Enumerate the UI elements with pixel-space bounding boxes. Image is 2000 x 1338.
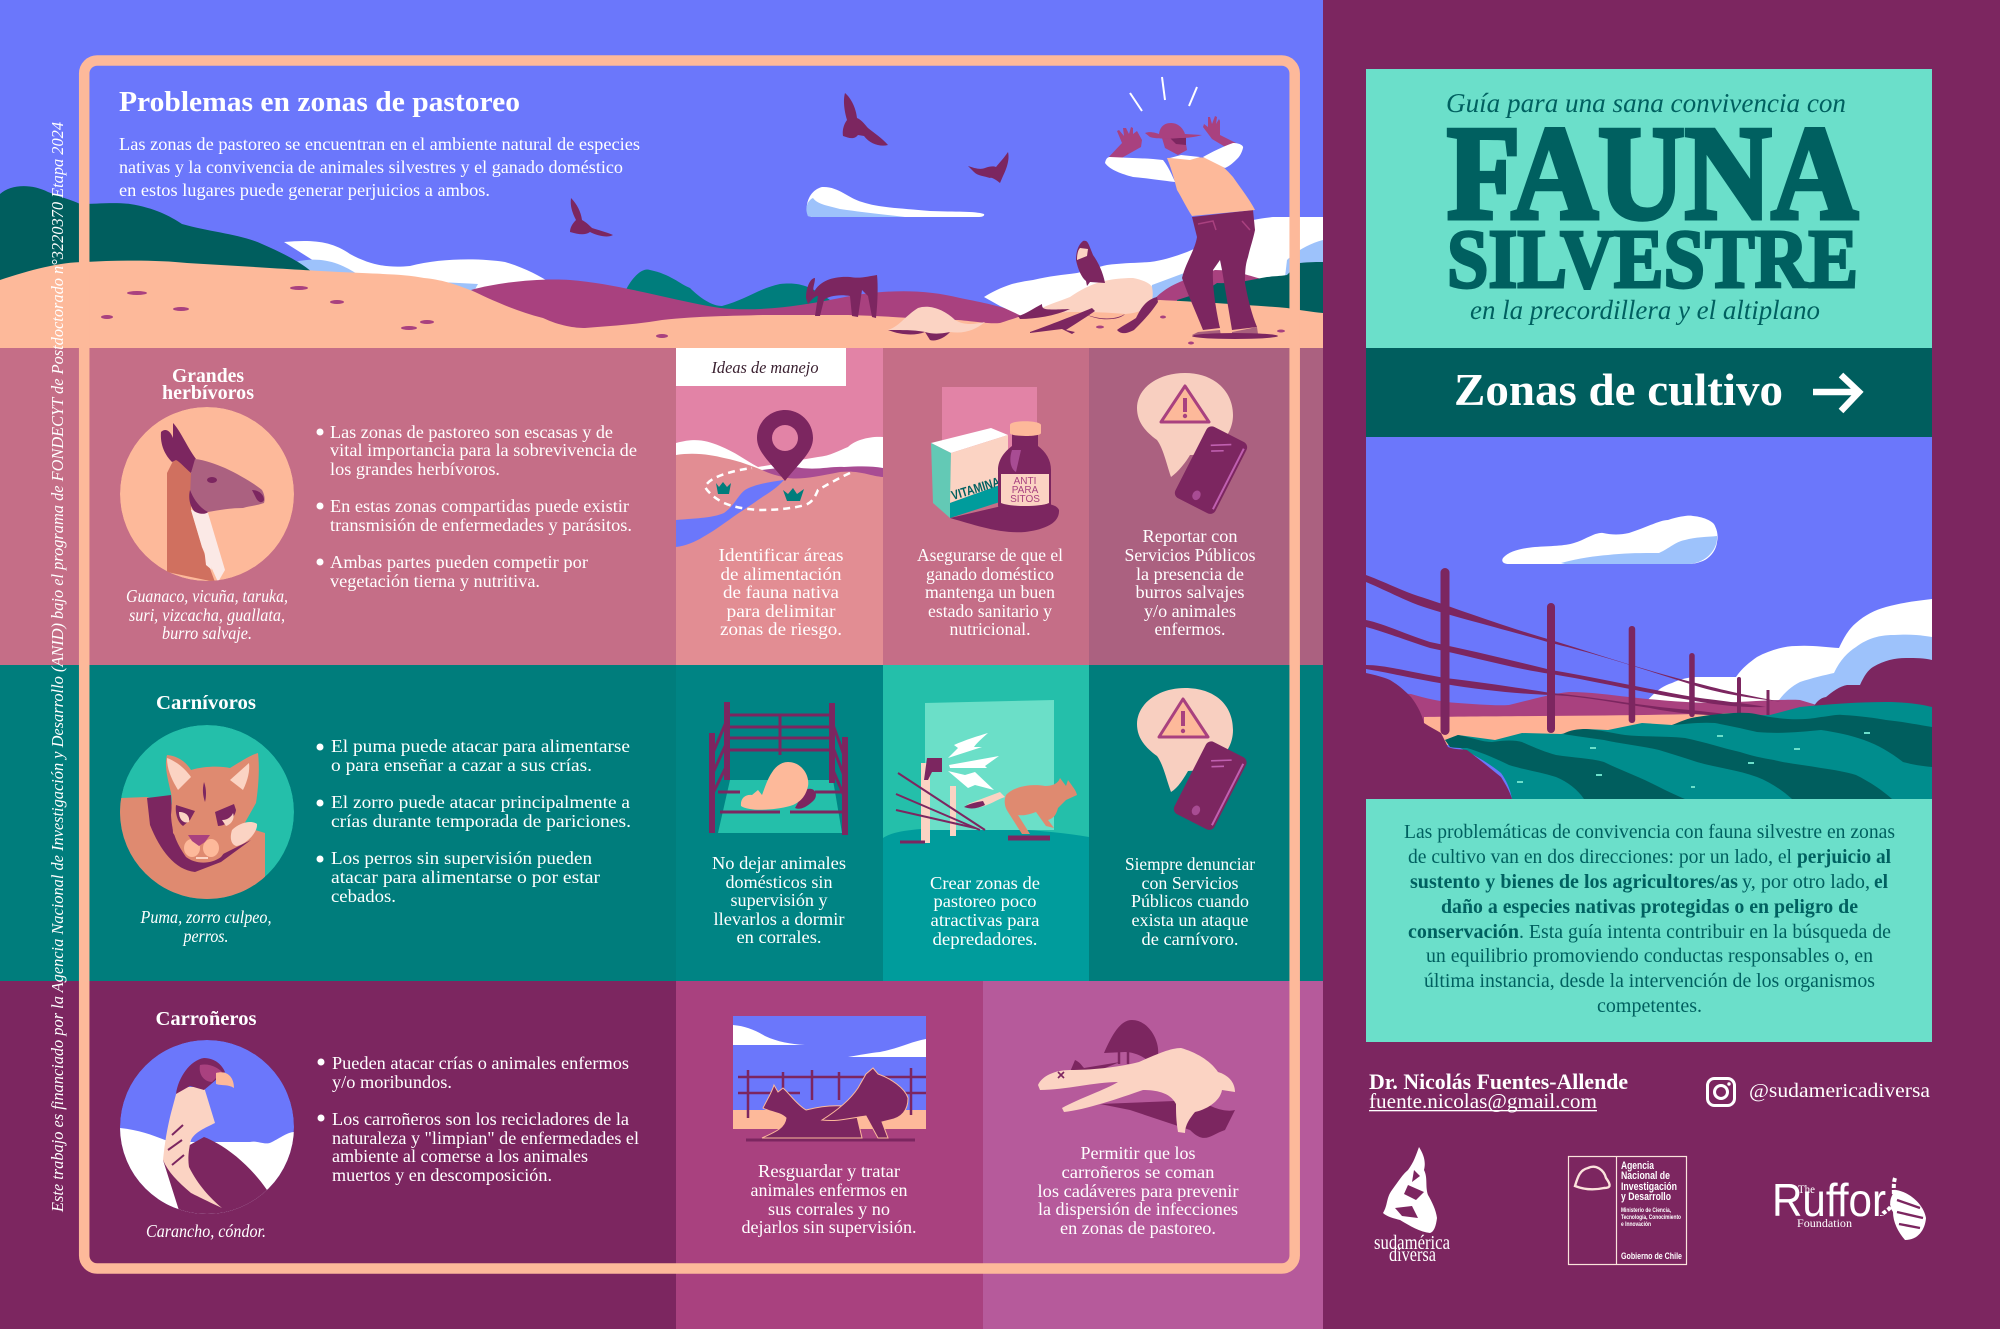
logo: ANID: Investigación xyxy=(1621,1181,1677,1193)
panel: intro description: de cultivo van en dos direcciones: por un lado, el xyxy=(1408,846,1792,868)
text: permitir: Permitir que los xyxy=(1080,1143,1196,1163)
text: identificar areas: de fauna nativa xyxy=(723,582,839,602)
text: reportar: burros salvajes xyxy=(1136,582,1244,602)
label: ideas de manejo: Ideas de manejo xyxy=(711,358,818,377)
fence xyxy=(1366,568,1783,735)
bullets: scavengers: muertos y en descomposición. xyxy=(332,1165,552,1185)
cloud top xyxy=(1502,516,1718,564)
back hills and clouds xyxy=(0,186,1323,340)
contact: instagram xyxy=(1708,1078,1930,1106)
intro text: problemas: en estos lugares puede generar perjuicios a ambos. xyxy=(119,180,490,200)
arrow xyxy=(1813,375,1859,411)
bullets: herbivores: Las zonas de pastoreo son escasas y de xyxy=(330,422,613,442)
intro text: problemas xyxy=(119,134,640,200)
dead animals xyxy=(888,278,1158,341)
farmer xyxy=(1105,77,1278,339)
text: permitir: los cadáveres para prevenir xyxy=(1038,1181,1238,1201)
text: reportar: Reportar con xyxy=(1142,526,1238,546)
heading: grandes herbivoros: Grandes xyxy=(172,365,244,387)
text: no dejar animales: llevarlos a dormir xyxy=(714,909,844,929)
text: reportar: enfermos. xyxy=(1154,619,1226,639)
icon: bird circle xyxy=(120,1040,294,1220)
peach ground xyxy=(0,261,1323,348)
text: asegurarse: ganado doméstico xyxy=(926,564,1054,584)
heading: carnivoros: Carnívoros xyxy=(156,692,256,714)
text: reportar: Servicios Públicos xyxy=(1124,545,1256,565)
text: no dejar animales: supervisión y xyxy=(730,890,828,910)
logo: sudamerica diversa: diversa xyxy=(1389,1244,1436,1266)
text: resguardar: dejarlos sin supervisión. xyxy=(742,1217,916,1237)
text: crear zonas: depredadores. xyxy=(932,929,1038,949)
text: asegurarse: Asegurarse de que el xyxy=(917,545,1063,565)
text: identificar areas: Identificar áreas xyxy=(718,545,844,565)
text: siempre denunciar: con Servicios xyxy=(1142,873,1238,893)
crop fields xyxy=(1366,673,1932,799)
icon: vitamins and antiparasitic bottle: VITAMINA xyxy=(949,474,1002,503)
icon: guanaco circle xyxy=(120,407,294,582)
text: permitir: la dispersión de infecciones xyxy=(1038,1199,1238,1219)
text: no dejar animales xyxy=(712,853,846,947)
bullets: scavengers: ambiente al comerse a los animales xyxy=(332,1146,588,1166)
label: ideas de manejo xyxy=(676,348,846,386)
caption: scavenger species: Carancho, cóndor. xyxy=(146,1221,266,1241)
bullets: scavengers: Pueden atacar crías o animales enfermos xyxy=(332,1053,629,1073)
panel: intro description: y, por otro lado, xyxy=(1742,871,1870,893)
panel: intro description: . Esta guía intenta contribuir en la búsqueda de xyxy=(1519,921,1891,943)
bullets: carnivores: o para enseñar a cazar a sus crías. xyxy=(331,755,592,775)
icon: electric fence and fox xyxy=(883,665,1089,843)
text: reportar xyxy=(1124,526,1256,639)
bullets: scavengers: naturaleza y "limpian" de enfermedades el xyxy=(332,1128,639,1148)
bullets: carnivores xyxy=(316,736,631,906)
bullets: scavengers xyxy=(318,1053,639,1185)
text: siempre denunciar: Siempre denunciar xyxy=(1125,854,1255,874)
text: no dejar animales: domésticos sin xyxy=(726,872,832,892)
text: asegurarse: nutricional. xyxy=(950,619,1030,639)
bullets: herbivores xyxy=(316,422,637,591)
panel: intro description: competentes. xyxy=(1597,995,1702,1017)
icon: vitamins and antiparasitic bottle: SITOS xyxy=(1010,494,1040,505)
text: siempre denunciar: exista un ataque xyxy=(1132,910,1248,930)
text: identificar areas: para delimitar xyxy=(726,601,836,621)
logo: ANID: e Innovación xyxy=(1621,1222,1651,1228)
heading: grandes herbivoros xyxy=(162,365,254,404)
text: reportar: la presencia de xyxy=(1136,564,1244,584)
title: fauna: FAUNA xyxy=(1447,99,1858,247)
logo: sudamerica diversa xyxy=(1374,1147,1450,1266)
logo: ANID: Agencia xyxy=(1621,1160,1655,1172)
logo: ANID: y Desarrollo xyxy=(1621,1191,1671,1203)
banner: zonas de cultivo: Zonas de cultivo xyxy=(1454,365,1783,415)
text: no dejar animales: No dejar animales xyxy=(712,853,846,873)
title: silvestre: SILVESTRE xyxy=(1447,213,1858,306)
text: resguardar: Resguardar y tratar xyxy=(758,1161,900,1181)
text: crear zonas: pastoreo poco xyxy=(934,891,1036,911)
contact: author: fuente.nicolas@gmail.com xyxy=(1369,1089,1597,1113)
heading: problemas: Problemas en zonas de pastoreo xyxy=(119,87,520,118)
bullets: herbivores: los grandes herbívoros. xyxy=(330,459,500,479)
icon: vitamins and antiparasitic bottle: ANTI xyxy=(1014,476,1036,487)
text: asegurarse: estado sanitario y xyxy=(928,601,1052,621)
icon: dead llama with scavenger xyxy=(1038,1020,1235,1138)
logo: ANID: Tecnología, Conocimiento xyxy=(1621,1215,1681,1221)
dog silhouette xyxy=(806,275,878,318)
panel: intro description: daño a especies nativas protegidas o en peligro de xyxy=(1441,896,1858,918)
right cover panel background xyxy=(1323,0,2000,1329)
logo: ANID xyxy=(1568,1156,1686,1265)
contact: author: Dr. Nicolás Fuentes-Allende xyxy=(1369,1069,1628,1094)
panel: intro description: Las problemáticas de convivencia con fauna silvestre en zonas xyxy=(1404,821,1895,843)
caption: carnivore species xyxy=(140,907,272,946)
text: resguardar xyxy=(742,1161,916,1237)
icon: person tending animal xyxy=(733,1016,926,1140)
logo: ANID: Gobierno de Chile xyxy=(1621,1251,1682,1261)
illustration: fenced fields xyxy=(1366,437,1932,799)
caption: carnivore species: Puma, zorro culpeo, xyxy=(140,907,272,927)
bullets: carnivores: El puma puede atacar para alimentarse xyxy=(331,736,630,756)
text: asegurarse: mantenga un buen xyxy=(925,582,1055,602)
text: permitir: carroñeros se coman xyxy=(1062,1162,1214,1182)
text: crear zonas: atractivas para xyxy=(930,910,1040,930)
bullets: carnivores: Los perros sin supervisión pueden xyxy=(331,848,592,868)
bullets: scavengers: Los carroñeros son los recicladores de la xyxy=(332,1109,629,1129)
icon: warning bubble and phone 2 xyxy=(1137,688,1249,832)
text: resguardar: sus corrales y no xyxy=(768,1199,890,1219)
banner: zonas de cultivo xyxy=(1366,348,1932,437)
text: siempre denunciar: de carnívoro. xyxy=(1142,929,1238,949)
contact: instagram: @sudamericadiversa xyxy=(1749,1080,1930,1102)
logo: ANID: Ministerio de Ciencia, xyxy=(1621,1208,1671,1214)
caption: herbivores species: Guanaco, vicuña, taruka, xyxy=(126,586,288,606)
icon: corral with animal xyxy=(709,702,848,835)
bullets: herbivores: En estas zonas compartidas puede existir xyxy=(330,496,629,516)
text: reportar: y/o animales xyxy=(1144,601,1236,621)
intro text: problemas: nativas y la convivencia de animales silvestres y el ganado doméstico xyxy=(119,157,623,177)
intro text: problemas: Las zonas de pastoreo se encuentran en el ambiente natural de especies xyxy=(119,134,640,154)
logo: the rufford foundation: Foundation xyxy=(1797,1216,1852,1230)
panel: intro description: perjuicio al xyxy=(1797,846,1891,868)
panel: hero landscape xyxy=(0,0,1323,348)
bullets: carnivores: crías durante temporada de pariciones. xyxy=(331,811,631,831)
text: identificar areas: zonas de riesgo. xyxy=(720,619,842,639)
heading: grandes herbivoros: herbívoros xyxy=(162,382,254,404)
bullets: carnivores: El zorro puede atacar principalmente a xyxy=(331,792,630,812)
caption: carnivore species: perros. xyxy=(182,926,228,946)
caption: herbivores species: burro salvaje. xyxy=(162,623,252,643)
panel: intro description: conservación xyxy=(1408,921,1519,943)
caption: herbivores species xyxy=(126,586,288,643)
icon: vitamins and antiparasitic bottle: PARA xyxy=(1012,485,1039,496)
panel: intro description: última instancia, desde la intervención de los organismos xyxy=(1424,970,1875,992)
icon: puma circle xyxy=(120,725,294,900)
bullets: herbivores: transmisión de enfermedades y parásitos. xyxy=(330,515,632,535)
bullets: herbivores: vegetación tierna y nutritiva. xyxy=(330,571,540,591)
bullets: carnivores: atacar para alimentarse o por estar xyxy=(331,867,600,887)
birds xyxy=(570,93,1009,236)
logo: the rufford foundation: Ruffor xyxy=(1772,1174,1886,1226)
contact: author xyxy=(1369,1069,1628,1113)
text: permitir: en zonas de pastoreo. xyxy=(1060,1218,1216,1238)
icon: tiger xyxy=(1882,1178,1926,1240)
panel: cover title xyxy=(1366,69,1932,348)
icon: warning bubble and phone xyxy=(1137,373,1249,516)
icon: map with pin xyxy=(676,348,883,560)
icon: vitamins and antiparasitic bottle xyxy=(931,387,1059,532)
heading: carroneros: Carroñeros xyxy=(156,1008,257,1030)
logo: the rufford foundation: The xyxy=(1798,1182,1815,1196)
panel: herbivores row xyxy=(0,348,1323,665)
panel: intro description: un equilibrio promoviendo conductas responsables o, en xyxy=(1426,945,1873,967)
bullets: carnivores: cebados. xyxy=(331,886,396,906)
panel: intro description: sustento y bienes de los agricultores/as xyxy=(1410,871,1738,893)
text: crear zonas: Crear zonas de xyxy=(930,873,1040,893)
text: permitir xyxy=(1038,1143,1238,1238)
cloud xyxy=(806,187,984,217)
subtitle bottom: en la precordillera y el altiplano xyxy=(1470,295,1820,325)
text: crear zonas xyxy=(930,873,1040,949)
text: siempre denunciar: Públicos cuando xyxy=(1131,891,1249,911)
text: asegurarse xyxy=(917,545,1063,639)
text: identificar areas xyxy=(718,545,844,639)
logo: sudamerica diversa: sudamérica xyxy=(1374,1232,1450,1254)
panel: intro description: el xyxy=(1874,871,1888,893)
logo: the rufford foundation xyxy=(1772,1174,1926,1240)
panel: carnivores row xyxy=(0,665,1323,981)
peach frame xyxy=(84,60,1295,1268)
text: resguardar: animales enfermos en xyxy=(750,1180,908,1200)
ground marks xyxy=(101,286,1285,344)
vertical funding note: Este trabajo es financiado por la Agencia Nacional de Investigación y Desarrollo (ANID) bajo el programa de FONDECYT de Postdoctorado n°3220370 Etapa 2024 xyxy=(48,122,67,1213)
panel: intro description xyxy=(1366,799,1932,1042)
bullets: scavengers: y/o moribundos. xyxy=(332,1072,452,1092)
text: identificar areas: de alimentación xyxy=(720,564,842,584)
logo: ANID: Nacional de xyxy=(1621,1170,1670,1182)
caption: herbivores species: suri, vizcacha, guallata, xyxy=(129,605,285,625)
vulture on carcass xyxy=(1076,241,1105,286)
text: no dejar animales: en corrales. xyxy=(736,927,822,947)
bullets: herbivores: Ambas partes pueden competir por xyxy=(330,552,588,572)
subtitle top: Guía para una sana convivencia con xyxy=(1446,88,1846,118)
bullets: herbivores: vital importancia para la sobrevivencia de xyxy=(330,440,637,460)
text: siempre denunciar xyxy=(1125,854,1255,949)
panel: scavengers row xyxy=(0,981,1323,1329)
